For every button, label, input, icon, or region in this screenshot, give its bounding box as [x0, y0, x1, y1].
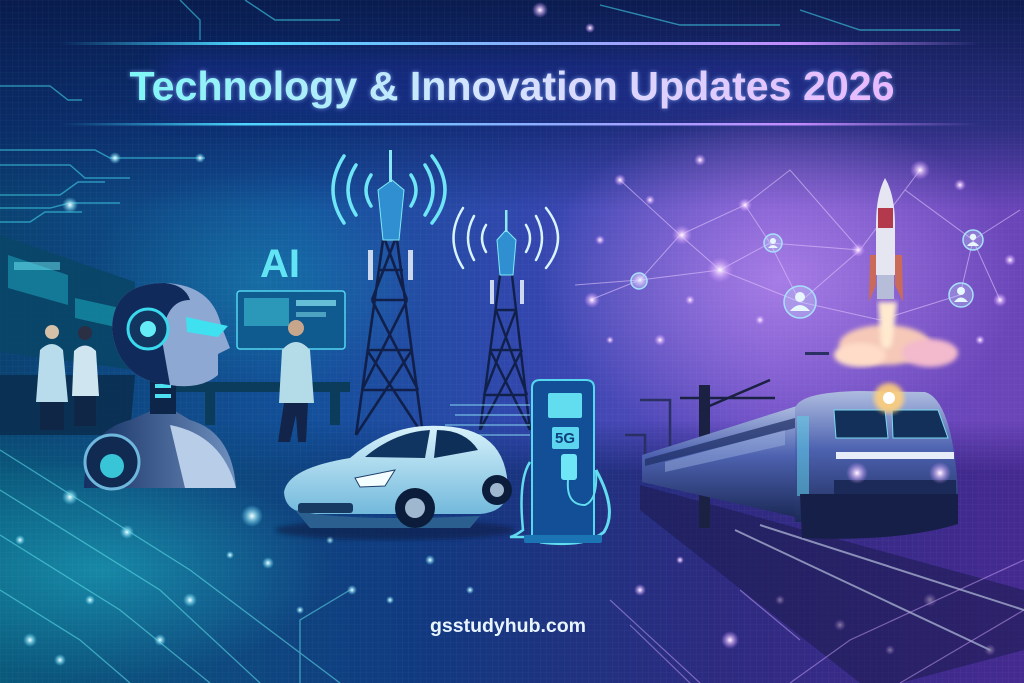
- icon: EV charging station: [510, 380, 609, 544]
- network lines: right: [575, 170, 1020, 320]
- icon: user nodes: [631, 230, 983, 318]
- icon: rocket with smoke: [834, 178, 958, 367]
- icon: rail poles and wires: [625, 352, 829, 528]
- icon: robot: [84, 283, 236, 489]
- circuit lines: lower area: [0, 450, 350, 683]
- panel: lab control wall: [0, 235, 135, 435]
- title: Technology & Innovation Updates 2026: [130, 63, 895, 109]
- icon: train: [642, 383, 958, 539]
- AI label: AI: [260, 242, 300, 286]
- website label: gsstudyhub.com: [430, 615, 586, 637]
- icon: electric car: [275, 426, 515, 540]
- icon: EV charging station: 5G: [555, 430, 575, 447]
- icon: tower two with signal waves: [445, 208, 558, 435]
- title: Technology & Innovation Updates 2026: [130, 63, 895, 109]
- circuit lines: upper left: [0, 0, 960, 222]
- icon: scientist at screen: [278, 320, 314, 442]
- rail track: [640, 485, 1024, 683]
- icon: tower one with signal waves: [333, 150, 445, 435]
- icon: scientists at the console: [36, 325, 99, 430]
- title band: [60, 42, 980, 126]
- panel: AI screen and desk: [175, 291, 350, 425]
